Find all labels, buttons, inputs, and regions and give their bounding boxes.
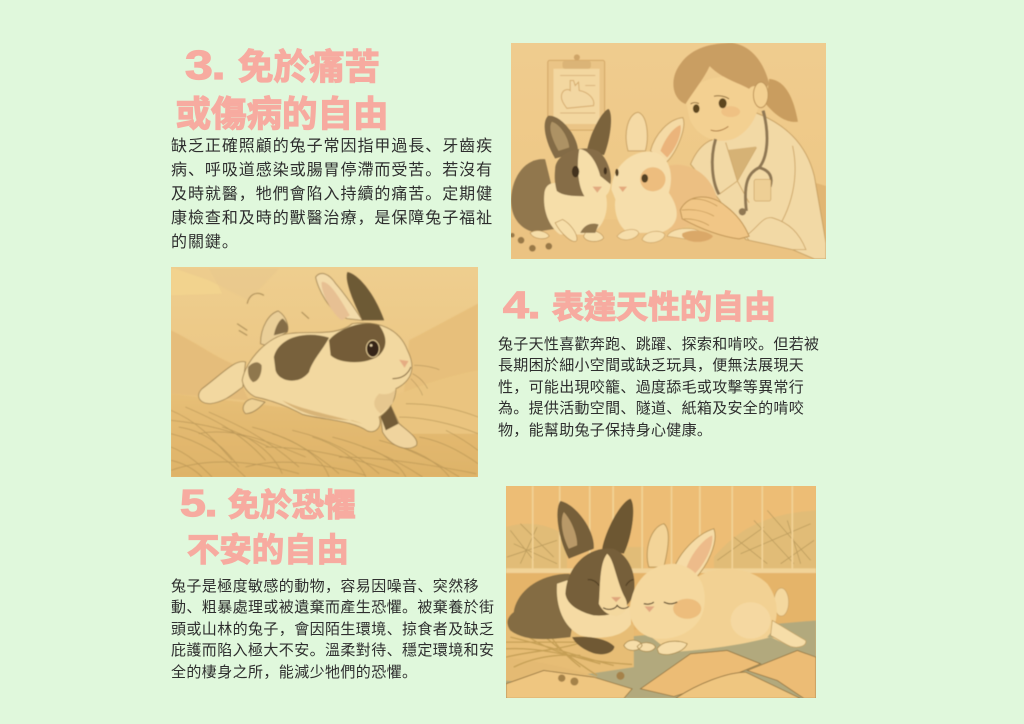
text block: section 3: 康檢查和及時的獸醫治療，是保障兔子福祉	[171, 210, 493, 227]
heading: section 3: 免於痛苦	[238, 47, 380, 87]
heading: section 4: 表達天性的自由	[552, 288, 776, 324]
running rabbit	[198, 272, 439, 448]
heading: section 3 second line: 或傷病的自由	[176, 94, 389, 134]
hand	[680, 197, 806, 249]
text block: section 3	[171, 137, 493, 251]
cream rabbit	[623, 523, 805, 654]
illustration: vet examining two rabbits	[511, 43, 826, 259]
text block: section 4: 長期困於細小空間或缺乏玩具，便無法展現天	[498, 357, 804, 374]
illustration: running rabbit in a field	[171, 267, 685, 644]
text block: section 4	[498, 336, 819, 438]
text block: section 4: 性，可能出現咬籠、過度舔毛或攻擊等異常行	[498, 378, 804, 396]
heading: section 4: 4.	[503, 284, 539, 326]
text block: section 5	[171, 578, 494, 680]
text block: section 4: 物，能幫助兔子保持身心健康。	[498, 422, 712, 438]
white rabbit	[611, 112, 717, 242]
droppings	[558, 671, 624, 685]
heading: section 3	[185, 42, 380, 88]
text block: section 5: 庇護而陷入極大不安。溫柔對待、穩定環境和安	[171, 642, 494, 659]
clipboard	[548, 54, 605, 130]
heading: section 5	[180, 483, 356, 525]
sky and hills	[170, 268, 478, 476]
text block: section 4: 兔子天性喜歡奔跑、跳躍、探索和啃咬。但若被	[498, 336, 819, 352]
text block: section 5: 頭或山林的兔子，會因陌生環境、掠食者及缺乏	[171, 620, 494, 638]
illustration: two rabbits sleeping in a hutch	[506, 486, 816, 698]
dark rabbit	[507, 498, 634, 654]
text block: section 5: 全的棲身之所，能減少牠們的恐懼。	[171, 664, 417, 680]
vet	[673, 42, 826, 258]
text block: section 3: 病、呼吸道感染或腸胃停滯而受苦。若沒有	[171, 162, 493, 179]
droppings	[510, 232, 552, 251]
floor tiles	[506, 650, 816, 698]
dark rabbit	[511, 108, 611, 241]
heading: section 5: 5.	[180, 483, 216, 525]
hutch wall and hay	[506, 486, 816, 698]
grass	[170, 403, 478, 476]
text block: section 3: 及時就醫，牠們會陷入持續的痛苦。定期健	[171, 186, 493, 203]
text block: section 3: 的關鍵。	[171, 234, 239, 251]
text block: section 5: 動、粗暴處理或被遺棄而產生恐懼。被棄養於街	[171, 599, 494, 616]
text block: section 4: 為。提供活動空間、隧道、紙箱及安全的啃咬	[498, 400, 804, 417]
text block: section 3: 缺乏正確照顧的兔子常因指甲過長、牙齒疾	[171, 138, 493, 154]
heading: section 5: 免於恐懼	[228, 487, 356, 523]
heading: section 3: 3.	[185, 42, 224, 88]
heading: section 5 second line: 不安的自由	[187, 532, 349, 568]
text block: section 5: 兔子是極度敏感的動物，容易因噪音、突然移	[171, 578, 479, 594]
hay pile	[506, 622, 632, 675]
